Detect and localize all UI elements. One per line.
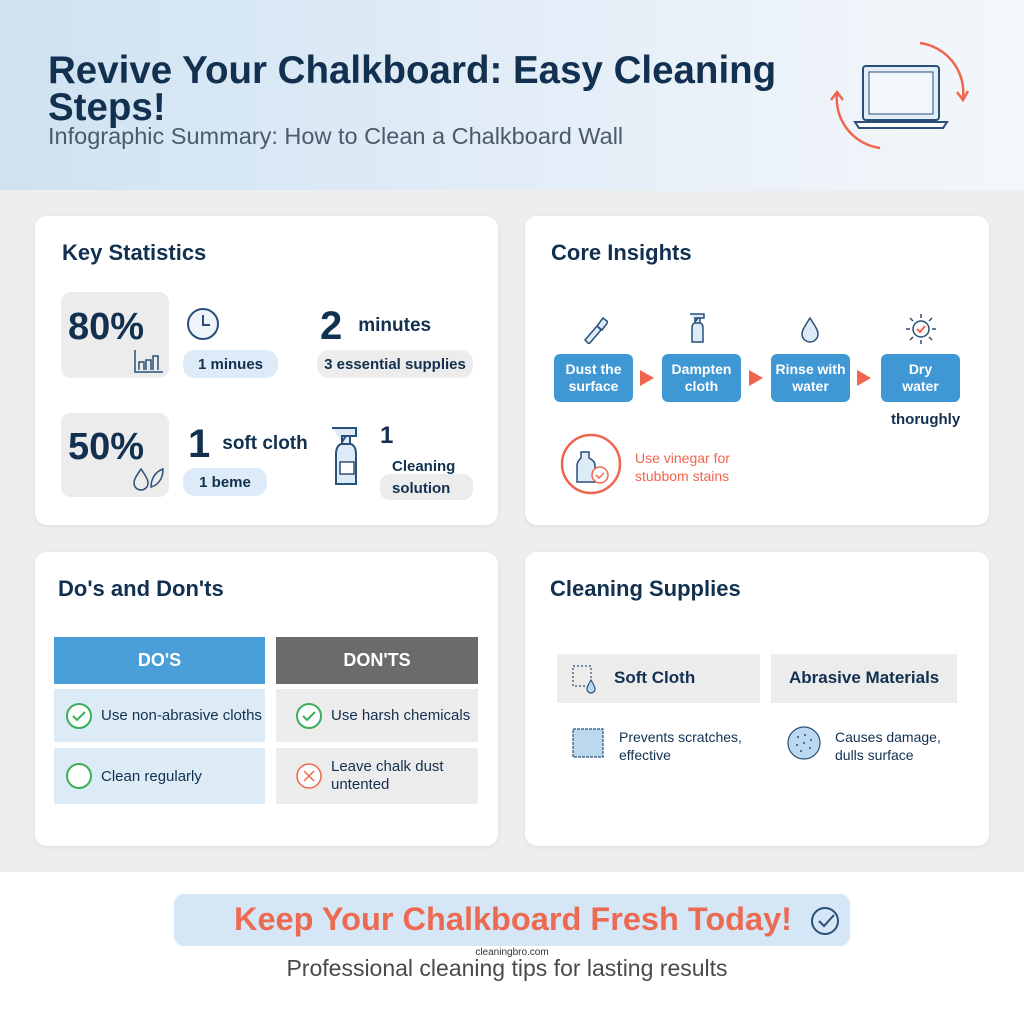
don'ts header: DON'TS: [343, 650, 411, 670]
heading: Do's and Don'ts: [58, 576, 224, 601]
process flow: [584, 313, 936, 344]
stat 1 cleaning solution: Cleaning: [392, 458, 455, 475]
dont row 2: Leave chalk dust: [331, 758, 444, 775]
heading: Core Insights: [551, 240, 692, 265]
supply: abrasive materials: dulls surface: [835, 747, 914, 763]
step: dust: [554, 354, 633, 402]
icon: check badge: [811, 907, 839, 935]
step: dry: [881, 354, 960, 402]
do row 1: Use non-abrasive cloths: [101, 707, 262, 724]
stat 80%: [61, 292, 169, 378]
supply: soft cloth: Prevents scratches,: [619, 729, 742, 745]
icon: clock: [187, 308, 219, 340]
don'ts header: [276, 637, 478, 684]
icon: water drop: [801, 316, 819, 343]
dont row 2: [276, 748, 478, 804]
step: dust: surface: [569, 378, 618, 394]
website: cleaningbro.com: [475, 947, 549, 958]
heading: Key Statistics: [62, 240, 206, 265]
pill: 1 minues: 1 minues: [198, 356, 263, 372]
stat 1 cleaning solution: 1: [380, 422, 393, 449]
arrow: [749, 370, 763, 386]
icon: brush: [584, 316, 608, 344]
header band: [0, 0, 1024, 190]
step: dampen: cloth: [685, 378, 718, 394]
icon: sun check: [906, 314, 936, 344]
supply: soft cloth: effective: [619, 747, 671, 763]
footer band: [0, 872, 1024, 1024]
panel: key statistics: [35, 216, 498, 525]
do's header: [54, 637, 265, 684]
dont row 2: untented: [331, 776, 389, 793]
heading: Cleaning Supplies: [550, 576, 741, 601]
subtitle: Infographic Summary: How to Clean a Chalkboard Wall: [48, 123, 623, 149]
supply: soft cloth: [557, 654, 760, 763]
step: dampen: Dampten: [672, 361, 731, 377]
stat 50%: 50%: [68, 426, 144, 468]
do row 2: Clean regularly: [101, 768, 202, 784]
callout: vinegar: [560, 434, 730, 494]
do row 2: [54, 748, 265, 804]
supply: abrasive materials: [771, 654, 957, 763]
callout: vinegar: stubbom stains: [635, 468, 729, 484]
step: dampen: [662, 354, 741, 402]
pill: 1 beme: [183, 468, 267, 496]
pill: 3 essential supplies: 3 essential supplies: [324, 356, 466, 372]
do's header: DO'S: [138, 650, 181, 670]
pill: 3 essential supplies: [317, 350, 473, 378]
cta text: Keep Your Chalkboard Fresh Today!: [234, 901, 792, 937]
stat 80%: 80%: [68, 306, 144, 348]
step: dry: water: [902, 378, 939, 394]
step: dust: Dust the: [566, 361, 622, 377]
supply: abrasive materials: Causes damage,: [835, 729, 941, 745]
label: thorughly: thorughly: [891, 411, 960, 428]
step: dry: Dry: [909, 361, 932, 377]
dont row 1: Use harsh chemicals: [331, 707, 470, 724]
dont row 1: [276, 689, 478, 742]
panel: cleaning supplies: [525, 552, 989, 846]
pill: 1 beme: 1 beme: [199, 474, 251, 490]
panel: do's and don'ts: [35, 552, 498, 846]
arrow: [857, 370, 871, 386]
icon: laptop with cycle arrows: [830, 42, 969, 150]
title: Revive Your Chalkboard: Easy Cleaning Steps!: [48, 49, 776, 129]
stat 50%: [61, 413, 169, 497]
step: rinse: water: [792, 378, 829, 394]
table: do's and don'ts: [54, 637, 478, 804]
step: rinse: Rinse with: [775, 361, 846, 377]
stat 2 minutes: 2 minutes: [320, 304, 431, 348]
panel: core insights: [525, 216, 989, 525]
icon: spray bottle: [332, 427, 357, 485]
stat 1 cleaning solution: solution: [392, 480, 450, 497]
callout: vinegar: Use vinegar for: [635, 450, 730, 466]
icon: spray: [690, 313, 705, 343]
arrow: [640, 370, 654, 386]
footer tagline: Professional cleaning tips for lasting results: [286, 955, 728, 981]
stat 1 cleaning solution: [380, 422, 473, 500]
step: rinse: [771, 354, 850, 402]
footer pill banner: [174, 894, 850, 946]
supply: soft cloth: Soft Cloth: [614, 668, 695, 687]
stat 1 soft cloth: 1 soft cloth: [188, 422, 308, 466]
pill: 1 minues: [183, 350, 278, 378]
do row 1: [54, 689, 265, 742]
supply: abrasive materials: Abrasive Materials: [789, 668, 939, 687]
